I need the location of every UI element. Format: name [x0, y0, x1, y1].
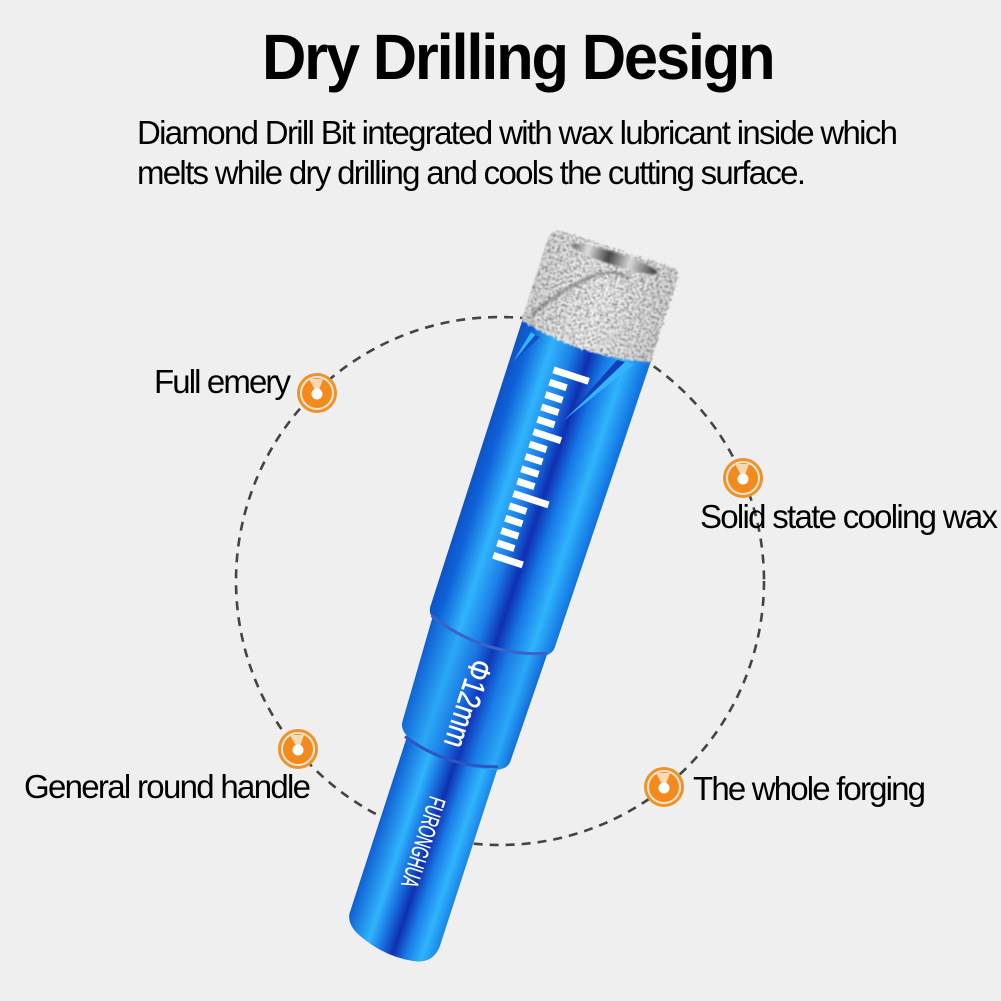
middle section	[392, 607, 550, 780]
grit streak	[531, 252, 630, 340]
size marking: Φ12mm	[437, 655, 499, 753]
dashed circle	[236, 317, 764, 845]
diamond head	[519, 228, 681, 371]
callout: general round handle: General round handle	[24, 768, 311, 805]
step ridge lower	[402, 736, 498, 775]
title: Dry Drilling Design	[262, 22, 776, 93]
description text: melts while dry drilling and cools the cutting surface.	[137, 154, 806, 191]
drill bit	[318, 226, 683, 976]
callout: full emery	[154, 363, 336, 412]
main body	[423, 316, 652, 667]
callout: solid state cooling wax: Solid state cooling wax	[700, 498, 998, 535]
brand marking: FURONGHUA	[395, 793, 450, 891]
callout: general round handle	[24, 730, 316, 805]
description text	[137, 114, 898, 191]
callout: the whole forging: The whole forging	[693, 770, 926, 807]
depth scale	[492, 367, 590, 570]
description text: Diamond Drill Bit integrated with wax lubricant inside which	[137, 114, 898, 151]
callout: full emery: Full emery	[154, 363, 292, 400]
callout: solid state cooling wax	[700, 460, 998, 535]
shank section	[341, 721, 503, 969]
flute grooves	[513, 332, 634, 421]
bore opening	[570, 239, 660, 279]
step ridge upper	[428, 616, 548, 664]
